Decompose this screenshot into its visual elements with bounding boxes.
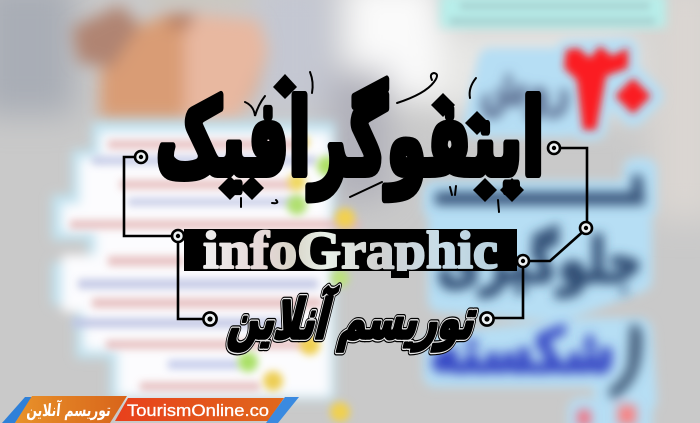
- right header box: [440, 0, 666, 28]
- hands: [72, 0, 268, 118]
- url text: TourismOnline.co: [127, 401, 269, 420]
- colored bullets: [238, 136, 355, 422]
- title: persian infographic: [156, 72, 544, 212]
- connector nodes: [135, 142, 592, 326]
- left panel text lines: [70, 140, 360, 391]
- left white panel: [52, 122, 335, 400]
- blue left stripe: [2, 397, 32, 423]
- blurred headline words: [430, 58, 645, 423]
- orange logo panel: [15, 396, 127, 423]
- headline halo: [435, 50, 651, 423]
- title dots: [218, 74, 524, 202]
- connector lines: [124, 148, 587, 319]
- blurred headline words: شکسته: [430, 314, 615, 387]
- blurred cyan header text: [450, 3, 655, 24]
- tourism online persian logo: توریسم آنلاین: [224, 286, 485, 352]
- blurred headline words: جلوگیری: [437, 224, 642, 297]
- blue right stripe: [266, 397, 299, 423]
- blurred headline words: روش: [480, 58, 570, 118]
- footer persian logo: توریسم آنلاین: [26, 399, 112, 421]
- tourism online persian logo: توریسم آنلاین: [224, 286, 485, 352]
- tourism online persian logo: [224, 286, 485, 352]
- blurred headline 30: [564, 46, 651, 130]
- title vowel marks: [241, 72, 499, 212]
- infoGraphic black label: infoGraphic: [203, 222, 498, 280]
- tourism online persian logo: توریسم آنلاین: [224, 286, 485, 352]
- footer banner: [2, 396, 299, 423]
- red url panel: [115, 398, 284, 421]
